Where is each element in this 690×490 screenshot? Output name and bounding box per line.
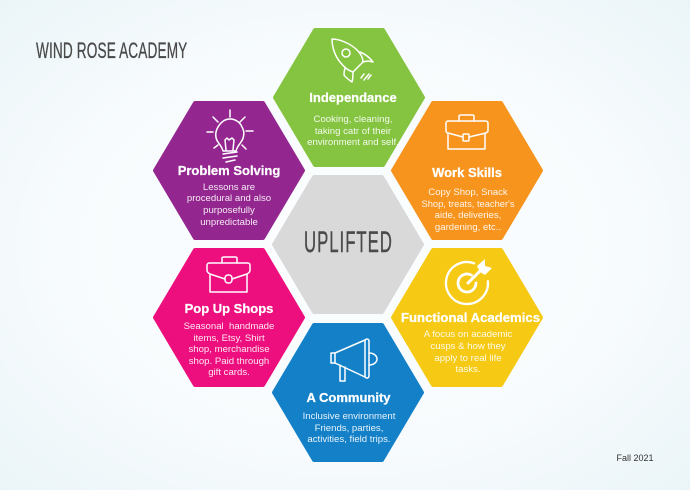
text block: cusps & how they: [430, 341, 506, 352]
text block: activities, field trips.: [307, 434, 391, 445]
text block: Shop, treats, teacher's: [422, 199, 515, 210]
panel: a community: [274, 325, 422, 460]
panel: work skills: [393, 103, 541, 238]
panel: center hexagon uplifted: [274, 177, 422, 312]
icon: megaphone: [331, 339, 377, 381]
panel: problem solving: [155, 103, 303, 238]
text block: Inclusive environment: [303, 411, 396, 422]
icon: briefcase: [446, 115, 488, 149]
icon: rocket: [332, 39, 373, 82]
heading: A Community: [306, 390, 391, 405]
title: WIND ROSE ACADEMY: [36, 38, 187, 63]
date label: Fall 2021: [616, 453, 654, 463]
heading: Work Skills: [432, 165, 502, 180]
text block: taking catr of their: [315, 126, 392, 137]
icon: target: [446, 259, 492, 304]
text block: environment and self.: [307, 137, 399, 148]
text block: Copy Shop, Snack: [428, 187, 508, 198]
text block: gardening, etc..: [435, 222, 501, 233]
text block: Seasonal handmade: [184, 321, 274, 332]
text block: shop, merchandise: [188, 344, 270, 355]
text block: aide, deliveries,: [435, 210, 501, 221]
text block: purposefully: [203, 205, 255, 216]
icon: light bulb: [207, 110, 253, 162]
text block: Lessons are: [203, 182, 255, 193]
text block: items, Etsy, Shirt: [193, 333, 265, 344]
heading: Independance: [309, 90, 397, 105]
text block: shop. Paid through: [189, 356, 269, 367]
panel: center hexagon uplifted: UPLIFTED: [304, 226, 392, 259]
text block: tasks.: [455, 364, 481, 375]
panel: functional academics: [393, 250, 541, 385]
text block: unpredictable: [200, 217, 258, 228]
icon: briefcase: [207, 257, 250, 292]
panel: pop up shops: [155, 250, 303, 385]
heading: Functional Academics: [401, 310, 540, 325]
heading: Problem Solving: [178, 163, 280, 178]
heading: Pop Up Shops: [185, 301, 273, 316]
text block: A focus on academic: [424, 329, 512, 340]
text block: apply to real life: [434, 353, 502, 364]
text block: Friends, parties,: [315, 423, 383, 434]
text block: procedural and also: [187, 193, 271, 204]
text block: Cooking, cleaning,: [314, 114, 392, 125]
text block: gift cards.: [208, 367, 250, 378]
panel: independance: [275, 30, 423, 165]
